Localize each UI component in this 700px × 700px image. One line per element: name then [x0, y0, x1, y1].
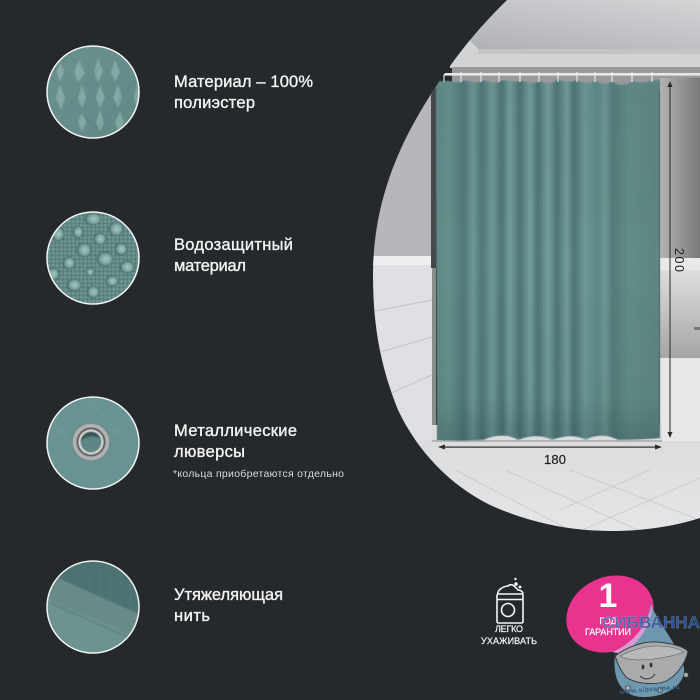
badge: 1 year warranty: 1 [599, 577, 617, 615]
cornice [450, 38, 700, 90]
curtain rod [441, 73, 700, 76]
swatch: metal grommet [45, 395, 141, 491]
logo text: СИБВАННА [602, 614, 700, 632]
swatch: weight thread [45, 559, 141, 660]
heading: grommets: Металлические [174, 422, 297, 440]
height label: 200 [672, 248, 686, 272]
heading: material: полиэстер [174, 94, 255, 112]
swatch: fabric diamonds [45, 44, 141, 140]
icon: washing machine [497, 578, 523, 623]
drop [614, 604, 684, 697]
badge: 1 year warranty: ГОД [599, 616, 617, 626]
caption: easy care: УХАЖИВАТЬ [481, 636, 537, 646]
heading: grommets: люверсы [174, 443, 245, 461]
right wall [660, 78, 700, 258]
bathtub [660, 358, 700, 448]
lilac edge [612, 604, 652, 654]
height arrow [668, 81, 672, 438]
footnote: *кольца приобретаются отдельно [173, 468, 344, 480]
ceiling [462, 0, 700, 50]
heading: material: Материал – 100% [174, 73, 313, 91]
right wainscot [660, 258, 700, 358]
caption: easy care: ЛЕГКО [495, 624, 523, 634]
floor [416, 441, 700, 531]
caption: easy care [481, 624, 537, 646]
rings [444, 72, 652, 82]
shower frame [431, 78, 662, 442]
watermark: Sibvanna logo [602, 604, 700, 697]
heading: waterproof: Водозащитный [174, 236, 293, 254]
heading: weight thread [174, 586, 283, 625]
heading: waterproof: материал [174, 257, 246, 275]
width label: 180 [544, 452, 566, 467]
badge: 1 year warranty [554, 561, 666, 667]
left wainscot [373, 256, 432, 446]
width arrow [438, 444, 662, 450]
panel: bathroom photo [370, 0, 700, 536]
curtain [436, 79, 660, 441]
heading: waterproof [174, 236, 293, 275]
heading: material [174, 73, 313, 112]
swatch: water drops [45, 210, 141, 306]
left wall [374, 86, 436, 256]
badge: 1 year warranty: ГАРАНТИИ [585, 627, 631, 637]
tub mascot [615, 642, 688, 692]
url text: www.sibvanna.ru [619, 684, 680, 696]
heading: weight thread: нить [174, 607, 210, 625]
heading: weight thread: Утяжеляющая [174, 586, 283, 604]
heading: grommets [174, 422, 297, 461]
